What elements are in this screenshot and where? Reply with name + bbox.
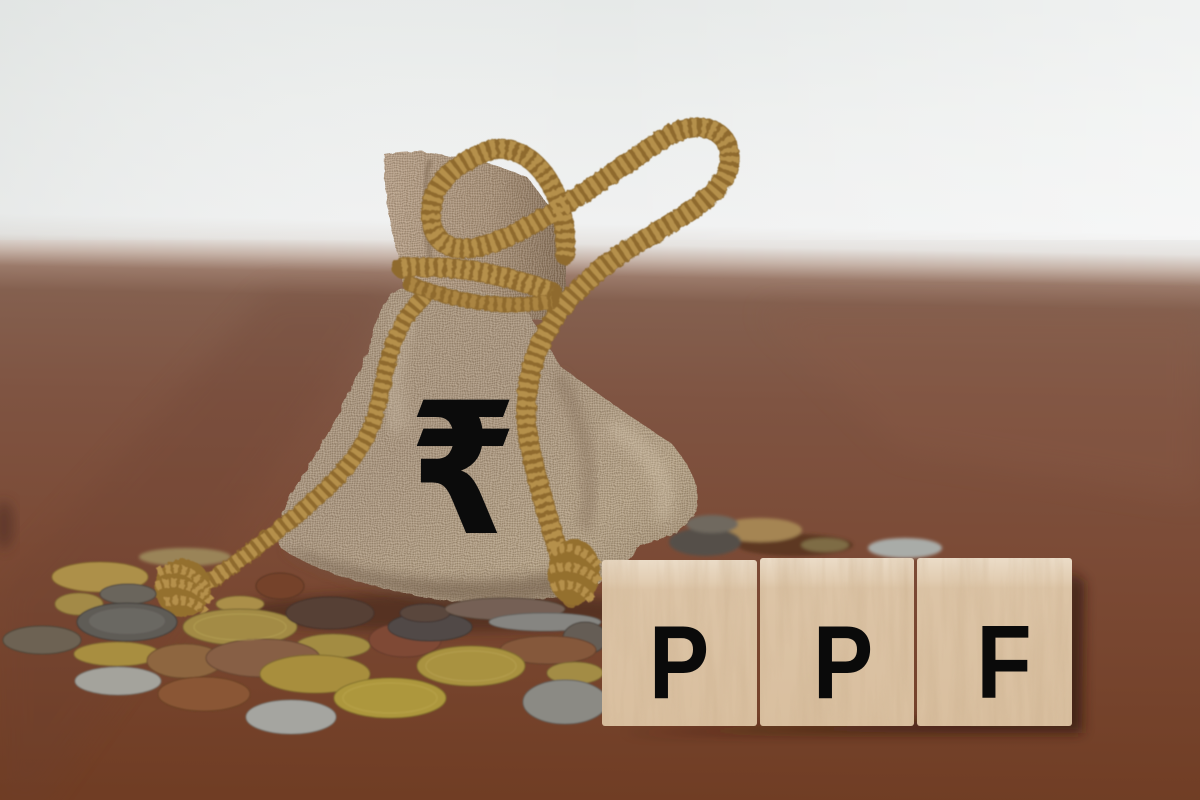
coins pile	[3, 562, 607, 734]
letter F: F	[976, 604, 1032, 720]
block 2: P	[760, 558, 914, 726]
shadow of the blocks	[620, 570, 1084, 733]
rope: right strand and loop	[431, 127, 730, 598]
shadow under the bag	[235, 592, 665, 632]
wood grain	[602, 558, 1049, 610]
bag body	[278, 287, 698, 603]
wooden blocks	[600, 555, 1075, 730]
blurred coins behind the bag	[139, 515, 942, 566]
rope	[155, 127, 730, 617]
rope: right knot	[548, 539, 600, 605]
letter P: P	[649, 604, 709, 720]
block 3: F	[917, 558, 1072, 726]
rope: left knot	[155, 559, 212, 617]
block 1: P	[602, 560, 757, 726]
money bag	[278, 151, 698, 603]
bag neck	[384, 151, 566, 320]
rope: long strand to left knot	[195, 296, 425, 590]
rope: tie around neck	[402, 267, 552, 292]
letter P: P	[813, 604, 873, 720]
rupee symbol: ₹	[409, 367, 517, 572]
